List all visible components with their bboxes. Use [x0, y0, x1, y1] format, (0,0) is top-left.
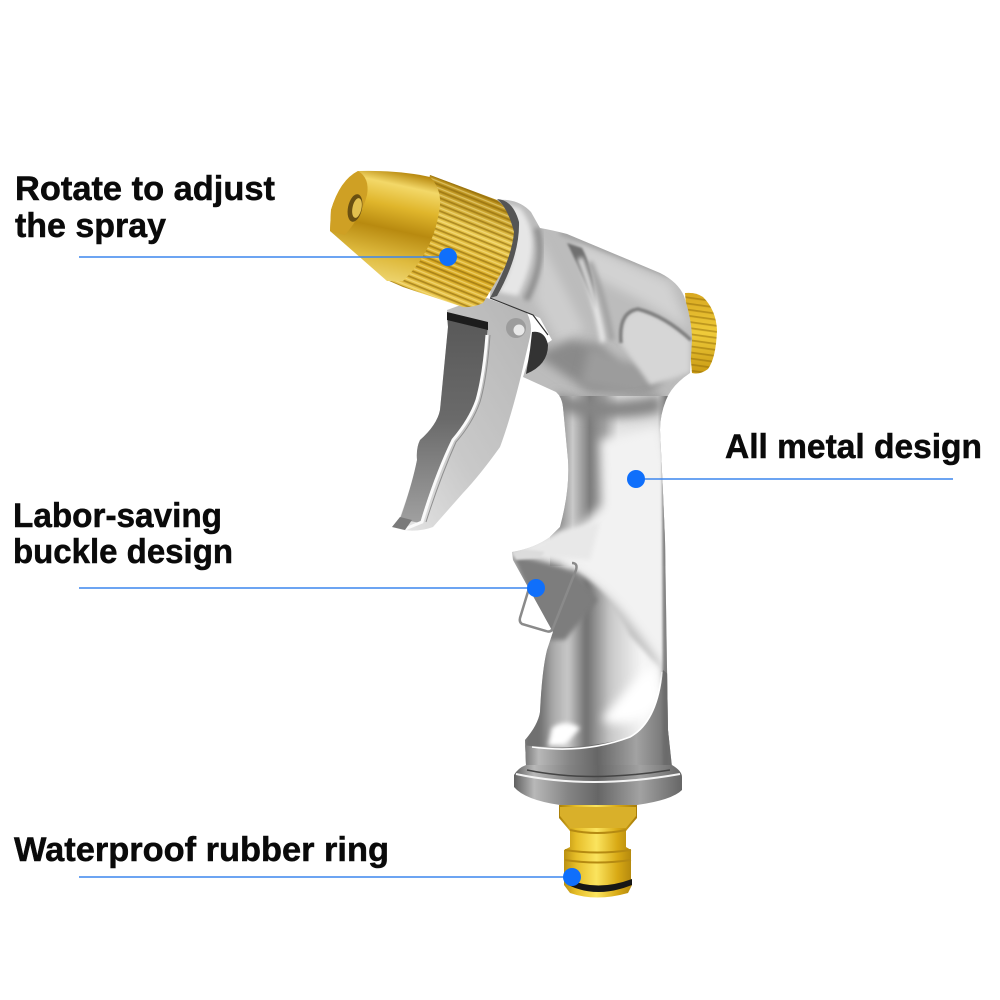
heading: Waterproof rubber ring: [14, 831, 389, 869]
marker dot: [627, 470, 645, 488]
upper body shading: [580, 245, 690, 325]
dark pivot gap: [526, 332, 548, 374]
rubber ring: [568, 879, 632, 892]
lower collar: [525, 670, 672, 765]
brass connector: [559, 805, 637, 898]
scoop highlight: [603, 662, 662, 724]
callout: labor-saving buckle design: buckle design: [13, 533, 233, 571]
heading: All metal design: [725, 428, 982, 466]
grip: [550, 396, 675, 566]
callout: all metal design: [627, 428, 982, 488]
silver body: [490, 200, 692, 772]
pivot pin: [506, 318, 526, 338]
curved fin: [567, 243, 596, 310]
trigger: [392, 298, 548, 531]
swoop panel: [621, 310, 690, 385]
buckle wire: [520, 563, 576, 632]
marker dot: [527, 579, 545, 597]
neck highlights: [498, 204, 533, 296]
marker dot: [439, 248, 457, 266]
lower grip: [525, 568, 662, 764]
flange ring: [514, 765, 682, 805]
gun illustration: [330, 171, 717, 898]
rear brass knob: [685, 293, 717, 374]
callout: labor-saving buckle design: [13, 497, 576, 632]
callout: rotate to adjust the spray: [15, 170, 457, 266]
callout: rotate to adjust the spray: the spray: [15, 207, 166, 245]
black gasket: [490, 199, 519, 298]
nozzle cap: [330, 171, 440, 281]
white buckle shoulder: [523, 424, 667, 672]
nozzle collar: [387, 175, 517, 307]
heading: Rotate to adjust: [15, 170, 275, 208]
heading: Labor-saving: [13, 497, 222, 535]
marker dot: [563, 868, 581, 886]
callout: waterproof rubber ring: [14, 831, 581, 886]
